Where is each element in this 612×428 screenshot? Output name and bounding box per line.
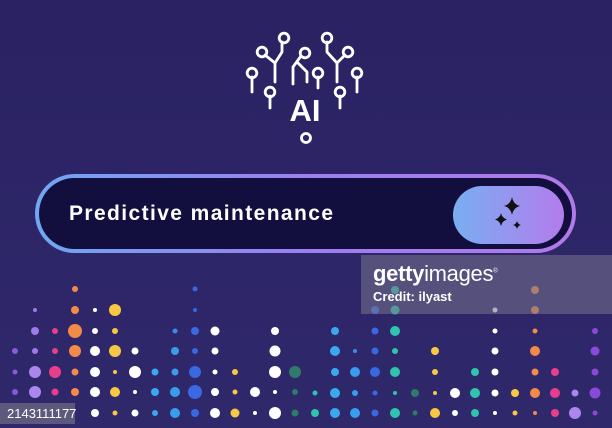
watermark: getty images credit: gettyimages® — [373, 261, 497, 286]
watermark: getty images credit — [361, 255, 612, 314]
search bar — [35, 174, 576, 253]
image id label — [0, 403, 75, 424]
icon: AI circuit: AI — [290, 93, 320, 128]
button with sparkles — [453, 186, 564, 244]
search text: Predictive maintenance — [69, 202, 334, 225]
watermark: getty images credit: Credit: ilyast — [373, 289, 452, 304]
image id label: 2143111177 — [7, 406, 76, 421]
